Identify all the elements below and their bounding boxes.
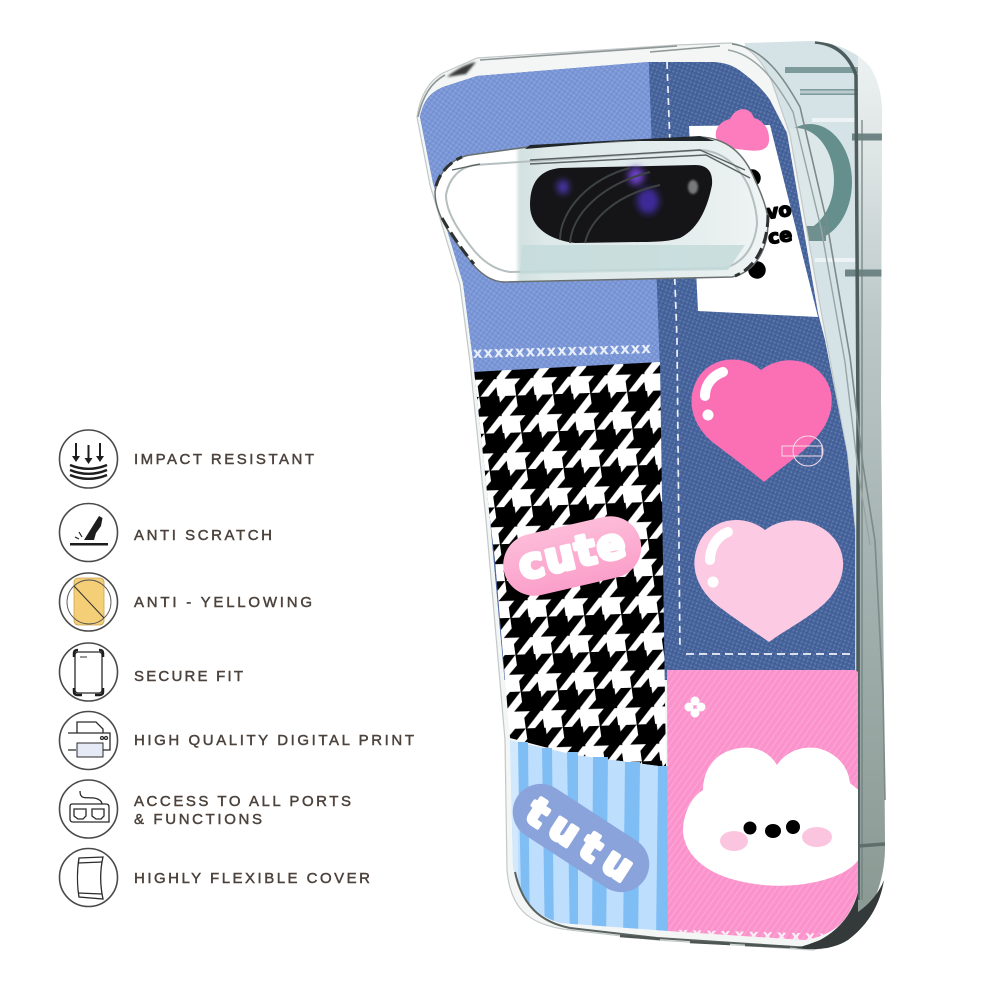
lower ring reflection [520,245,745,274]
cross stitching bottom: xxxxxxxxxxxx [678,924,844,946]
feature: highly flexible cover [60,848,370,906]
feature: anti yellowing: ANTI - YELLOWING [134,594,312,611]
phone behind the case [744,41,885,950]
feature: impact resistant [60,430,314,488]
heart: light pink [694,520,843,642]
case top rim shading [418,46,720,117]
ring dark end accents [436,157,768,276]
feature: highly flexible cover: HIGHLY FLEXIBLE COVER [134,870,370,887]
cross stitching top: xxxxxxxxxxxxxxxxx [473,339,651,362]
camera island [530,165,712,243]
feature: access to all ports [60,780,351,838]
clear case rim [417,43,858,950]
feature: anti scratch [60,504,272,562]
feature: access to all ports: ACCESS TO ALL PORTS [134,793,351,810]
feature: access to all ports: & FUNCTIONS [134,811,262,828]
label: tutu: tutu [518,789,641,890]
case edge inner line [728,50,870,545]
printed design [400,40,880,950]
panel: light denim [420,62,660,372]
inner ring highlight [446,150,757,272]
panel: blue stripes [510,740,668,931]
panel: white note [689,125,818,317]
case curved edge [732,44,885,800]
bottom right corner shadow [795,880,884,949]
panel: houndstooth [474,362,666,766]
feature: anti yellowing [60,573,312,631]
lens glints [557,167,698,243]
feature: secure fit [60,643,243,701]
icon: pink cloud on note [716,109,769,151]
ring top reflections [452,150,750,178]
stitching horizontal [686,653,853,655]
case corner shadow [447,62,476,77]
ring top edge [525,136,715,149]
note lettering [744,170,794,278]
character: white cloud face [683,748,862,886]
camera cutout [435,136,768,282]
label: cute: cute [514,518,630,590]
icon: small flower [684,696,706,718]
panel: pink denim [667,670,865,950]
stamp [782,436,823,466]
note lettering: vo [765,199,793,224]
feature: secure fit: SECURE FIT [134,668,243,685]
feature: high quality digital print: HIGH QUALITY DIGITAL PRINT [134,732,414,749]
bottom port cutouts [620,936,790,947]
heart: hot pink [692,360,832,482]
feature: high quality digital print [60,712,414,770]
stitching vertical [667,62,680,650]
feature: anti scratch: ANTI SCRATCH [134,527,272,544]
panel: dark denim [420,62,858,680]
note lettering: ce [767,224,794,249]
lens ring [435,137,768,282]
feature: impact resistant: IMPACT RESISTANT [134,451,314,468]
feature list [60,430,414,906]
bottom rim line [515,872,810,948]
phone frame dark line [857,500,860,895]
